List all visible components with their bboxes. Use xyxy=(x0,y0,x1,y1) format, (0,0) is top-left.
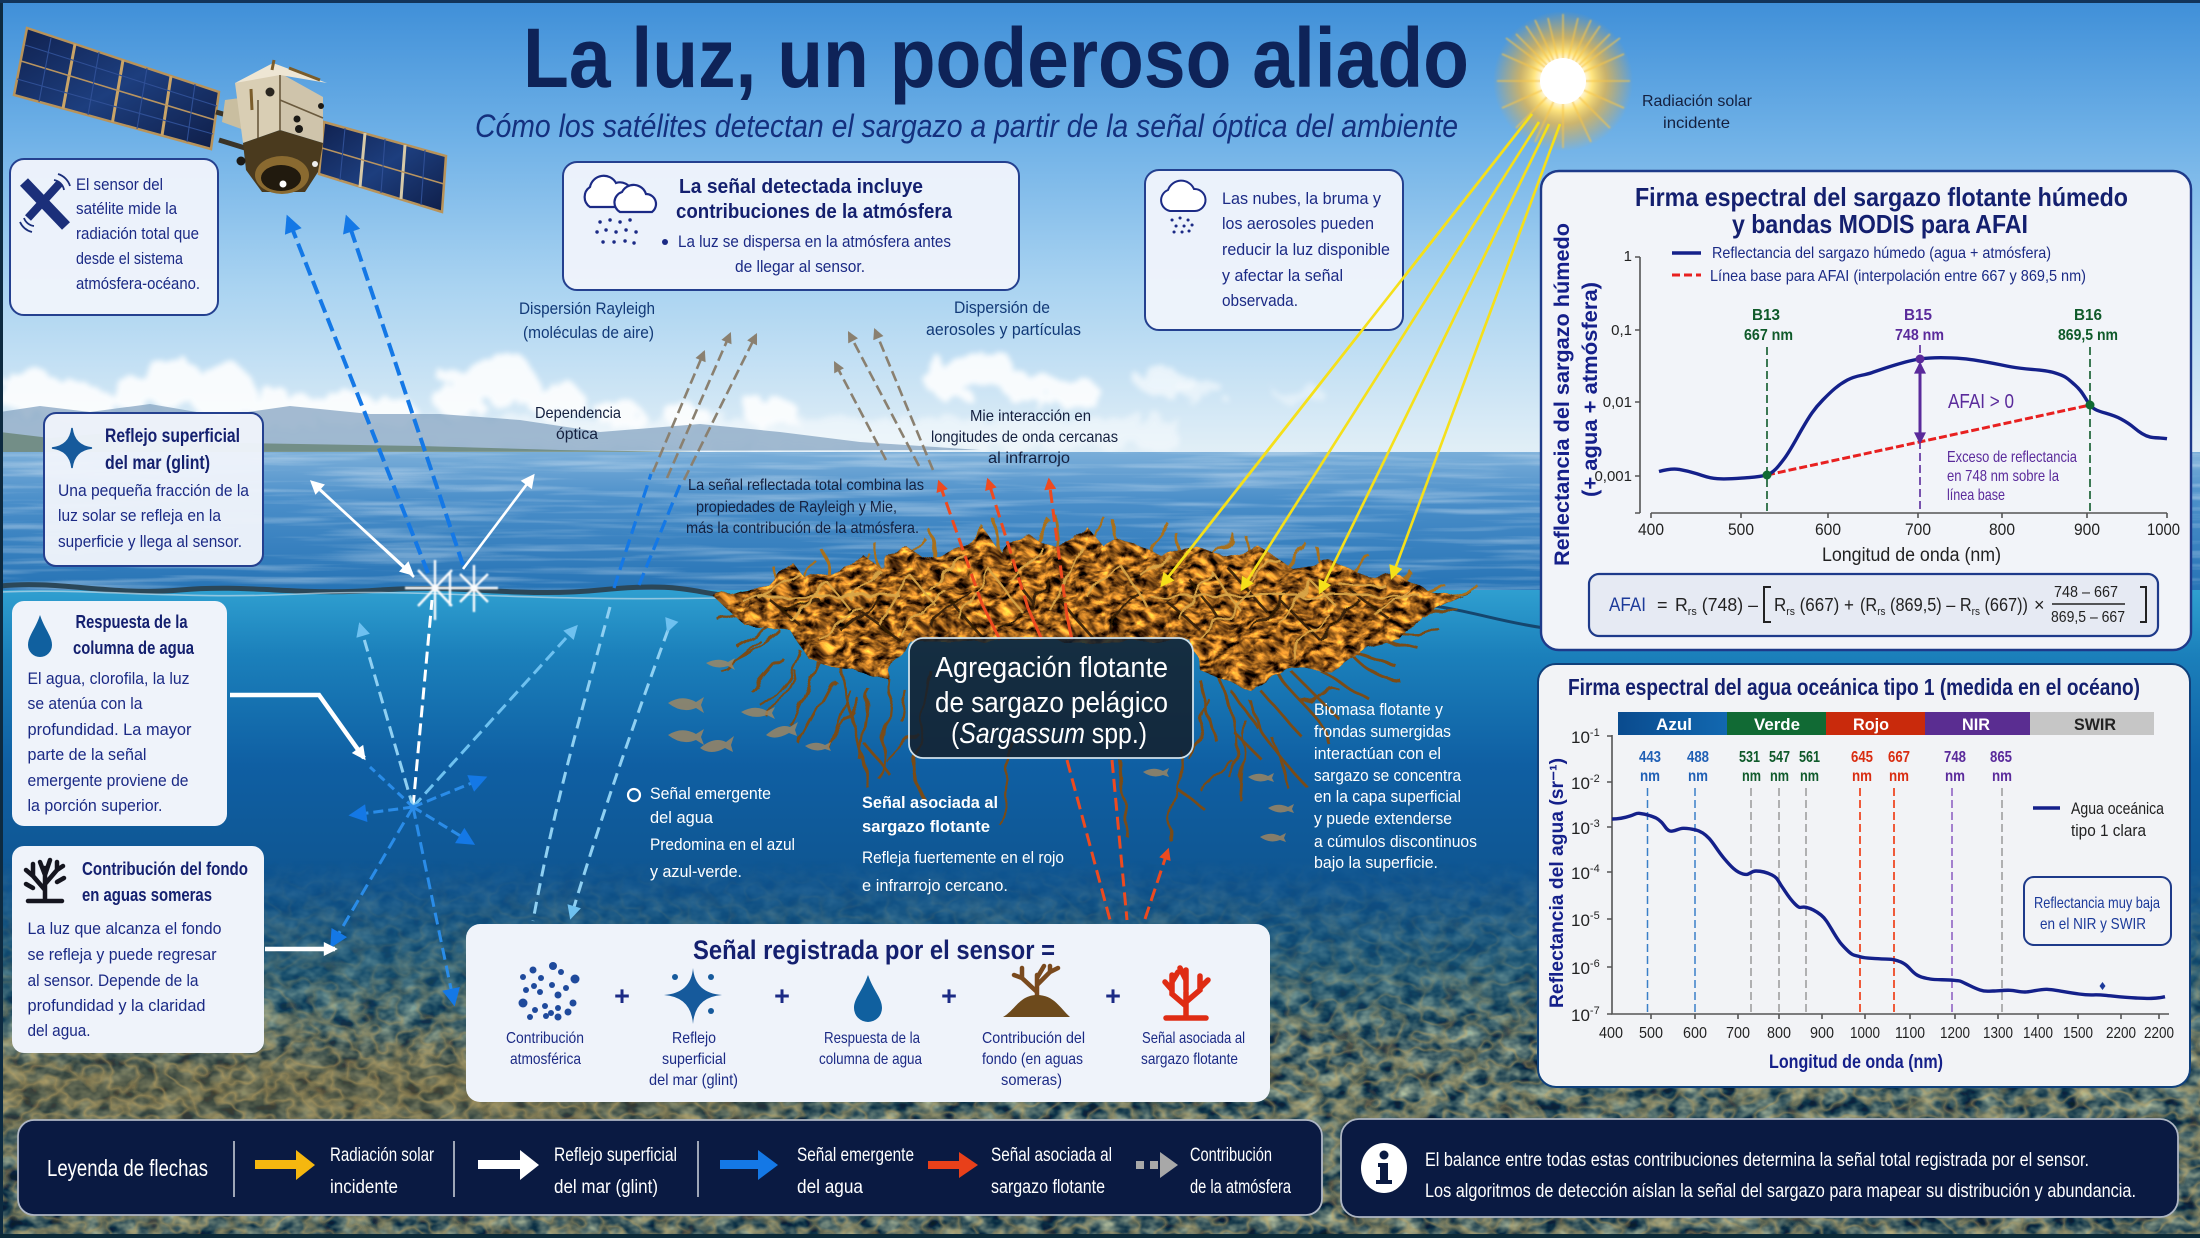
y axis label: Reflectancia del sargazo húmedo xyxy=(1551,223,1574,566)
spectral band bar: SWIR xyxy=(2074,715,2116,734)
axes: 2200 xyxy=(2144,1025,2174,1042)
band markers: B13 xyxy=(1752,307,1780,324)
label: sargassum signal: Señal asociada al xyxy=(1142,1030,1245,1047)
axes: 600 xyxy=(1815,520,1841,539)
formula: AFAI: rs xyxy=(1877,606,1886,618)
wavelength labels: nm xyxy=(1770,768,1789,785)
axes: 1500 xyxy=(2063,1025,2093,1042)
axes: 1000 xyxy=(1850,1025,1880,1042)
text: incident radiation: Radiación solar xyxy=(330,1145,435,1166)
panel: bottom contribution xyxy=(12,846,264,1053)
axes: 900 xyxy=(2074,520,2100,539)
label: Mie interaction: Mie interacción en xyxy=(970,408,1091,425)
text: water-leaving signal: Predomina en el azul xyxy=(650,835,795,854)
text: sargassum signal: sargazo flotante xyxy=(862,817,990,836)
text: sargassum signal xyxy=(991,1145,1112,1198)
panel: clouds, haze and aerosols xyxy=(1145,170,1403,330)
spectral curve xyxy=(1612,813,2165,998)
text: water column description: El agua, clorofila, la luz xyxy=(28,669,190,688)
label: atmospheric contribution: atmosférica xyxy=(510,1051,581,1068)
callout: floating pelagic sargassum: (Sargassum spp.) xyxy=(951,718,1147,750)
text: water-leaving signal xyxy=(628,784,795,881)
formula: AFAI: AFAI xyxy=(1609,595,1646,616)
text: floating biomass: a cúmulos discontinuos xyxy=(1314,832,1477,851)
text: sensor description: satélite mide la xyxy=(76,199,177,218)
annotation: reflectance excess xyxy=(1947,449,2077,504)
axes: -4 xyxy=(1590,863,1600,875)
callout: floating pelagic sargassum xyxy=(909,638,1193,758)
wavelength labels: nm xyxy=(1992,768,2012,785)
axes: -2 xyxy=(1590,773,1600,785)
icon: cloud xyxy=(1161,181,1206,232)
subtitle: Cómo los satélites detectan el sargazo a partir de la señal óptica del ambiente xyxy=(475,108,1458,144)
text: sargassum signal xyxy=(862,793,1064,895)
label: sargassum signal xyxy=(1141,1030,1245,1068)
spectral band bar xyxy=(1618,712,2154,735)
icon: seabed coral xyxy=(1003,966,1070,1017)
heading xyxy=(105,426,240,474)
label: total reflected signal: propiedades de Rayleigh y Mie, xyxy=(696,499,897,516)
arrow: water signal xyxy=(720,1150,778,1180)
label: sea glint: Reflejo xyxy=(672,1030,716,1047)
panel: sargassum spectral signature chart xyxy=(1541,171,2191,650)
label: bottom contribution xyxy=(982,1030,1085,1089)
legend xyxy=(1672,245,2086,285)
text: sargassum signal: Señal asociada al xyxy=(991,1145,1112,1166)
label: aerosol scattering xyxy=(926,298,1081,339)
wavelength labels xyxy=(1639,749,2012,785)
illustration: satellite xyxy=(14,28,446,212)
arrow: yellow beam crossing the cloud panel xyxy=(1162,114,1532,585)
text: bottom description: profundidad y la claridad xyxy=(28,996,206,1015)
wavelength labels: 443 xyxy=(1639,749,1661,766)
band markers: B15 xyxy=(1904,307,1932,324)
text: water-leaving signal: y azul-verde. xyxy=(650,862,742,881)
text: water column description xyxy=(28,669,192,815)
text: floating biomass: en la capa superficial xyxy=(1314,787,1461,806)
arrows: incident solar radiation xyxy=(1162,114,1560,592)
panel: satellite sensor xyxy=(10,159,218,315)
formula: AFAI: rs xyxy=(1972,606,1980,618)
text: floating biomass: frondas sumergidas xyxy=(1314,722,1451,741)
formula: AFAI: (667)) xyxy=(1980,595,2028,615)
label: Rayleigh scattering: (moléculas de aire) xyxy=(523,323,654,342)
axes: 10 xyxy=(1571,911,1590,930)
icon: dark coral xyxy=(26,860,64,901)
axes: 10 xyxy=(1571,959,1590,978)
wavelength labels: 645 xyxy=(1851,749,1873,766)
wavelength labels: 488 xyxy=(1687,749,1709,766)
legend: tipo 1 clara xyxy=(2071,821,2146,840)
text: glint xyxy=(554,1145,677,1198)
text: balance note xyxy=(1425,1150,2136,1202)
dividers xyxy=(234,1141,698,1197)
text: water column description: emergente proviene de xyxy=(28,771,188,790)
spectral band bar: NIR xyxy=(1962,715,1990,734)
band markers: 748 nm xyxy=(1895,327,1944,344)
text: cloud note: reducir la luz disponible xyxy=(1222,240,1390,259)
heading: La señal detectada incluye xyxy=(679,176,923,198)
heading: Reflejo superficial xyxy=(105,426,240,447)
text: sargassum signal: e infrarrojo cercano. xyxy=(862,876,1008,895)
axes: 1300 xyxy=(1983,1025,2013,1042)
text: atmosphere xyxy=(1190,1145,1291,1198)
axes: 900 xyxy=(1810,1025,1834,1042)
axes: 800 xyxy=(1989,520,2015,539)
formula: AFAI: (667) + xyxy=(1795,595,1854,615)
panel: sensor signal equation xyxy=(466,924,1270,1102)
text: bottom description: La luz que alcanza el fondo xyxy=(28,919,222,938)
text: glint: Reflejo superficial xyxy=(554,1145,677,1166)
y axis label: Reflectancia del agua (sr⁻¹) xyxy=(1547,758,1568,1008)
text: floating biomass: bajo la superficie. xyxy=(1314,853,1438,872)
band markers xyxy=(1744,307,2118,513)
icon: glint star xyxy=(664,968,722,1024)
text: floating biomass: Biomasa flotante y xyxy=(1314,700,1443,719)
axes: -5 xyxy=(1590,910,1600,922)
text: floating biomass xyxy=(1314,700,1477,872)
formula: AFAI: = xyxy=(1657,595,1668,615)
axes: 0,01 xyxy=(1603,394,1632,411)
formula: AFAI: rs xyxy=(1786,606,1795,618)
label: Mie interaction xyxy=(931,408,1118,467)
text: cloud note: y afectar la señal xyxy=(1222,266,1343,285)
axes: 2200 xyxy=(2106,1025,2136,1042)
label: incident solar radiation xyxy=(1642,93,1753,132)
arrow: incident radiation xyxy=(255,1150,315,1180)
annotation: reflectance excess: Exceso de reflectancia xyxy=(1947,449,2077,466)
text: glint description: superficie y llega al sensor. xyxy=(58,532,242,551)
text: bottom description: del agua. xyxy=(28,1021,90,1040)
text: floating biomass: y puede extenderse xyxy=(1314,809,1452,828)
label: bottom contribution: fondo (en aguas xyxy=(982,1051,1083,1068)
label: Rayleigh scattering: Dispersión Rayleigh xyxy=(519,299,655,318)
text: sargassum signal: Señal asociada al xyxy=(862,793,998,812)
annotation: reflectance excess: en 748 nm sobre la xyxy=(1947,468,2059,485)
spectral band bar: Azul xyxy=(1656,715,1692,734)
text: bottom description xyxy=(28,919,222,1040)
wavelength labels: nm xyxy=(1852,768,1872,785)
formula: AFAI: rs xyxy=(1688,606,1697,618)
wavelength labels: 667 xyxy=(1888,749,1910,766)
text: sensor description: desde el sistema xyxy=(76,249,183,268)
heading: Respuesta de la xyxy=(76,612,188,632)
text: cloud note: los aerosoles pueden xyxy=(1222,214,1374,233)
panel: atmospheric contributions xyxy=(563,162,1019,290)
spectral band bar: Rojo xyxy=(1853,715,1889,734)
axes xyxy=(1594,248,2180,539)
band markers: B16 xyxy=(2074,307,2102,324)
axes: 1000 xyxy=(2147,520,2180,539)
x axis label: Longitud de onda (nm) xyxy=(1769,1052,1943,1073)
x axis label: Longitud de onda (nm) xyxy=(1822,545,2001,566)
y axis label xyxy=(1551,223,1602,566)
label: atmospheric contribution: Contribución xyxy=(506,1030,584,1047)
text: glint description: Una pequeña fracción de la xyxy=(58,481,249,500)
arrows: signal associated with floating sargassum xyxy=(939,480,1168,920)
arrows: sea surface glint xyxy=(312,476,533,620)
axes: 500 xyxy=(1639,1025,1663,1042)
illustration: floating sargassum mat xyxy=(668,515,1478,842)
heading: contribuciones de la atmósfera xyxy=(676,201,953,223)
annotation: reflectance excess: línea base xyxy=(1947,487,2005,504)
text: sargassum signal: Refleja fuertemente en el rojo xyxy=(862,848,1064,867)
arrows: atmospheric contribution xyxy=(653,330,933,480)
arrow: atmosphere xyxy=(1136,1152,1178,1178)
axes: 400 xyxy=(1638,520,1664,539)
label: sea glint: del mar (glint) xyxy=(649,1072,738,1089)
text: floating biomass: sargazo se concentra xyxy=(1314,766,1461,785)
axes: 10 xyxy=(1571,819,1590,838)
excess arrow xyxy=(1762,354,2094,480)
axes: 1200 xyxy=(1940,1025,1970,1042)
panel: ocean water spectral signature chart xyxy=(1538,664,2190,1087)
wavelength labels: 748 xyxy=(1944,749,1966,766)
heading xyxy=(1635,182,2128,239)
operator: plus: + xyxy=(614,981,630,1011)
panel: sea surface glint xyxy=(44,413,263,566)
axes: 700 xyxy=(1726,1025,1750,1042)
label: incident solar radiation: Radiación solar xyxy=(1642,93,1753,110)
text: incident radiation: incidente xyxy=(330,1177,398,1198)
label: aerosol scattering: Dispersión de xyxy=(954,298,1050,317)
wavelength labels: nm xyxy=(1640,768,1660,785)
text: balance note: El balance entre todas estas contribuciones determina la señal total registrada por el sensor. xyxy=(1425,1150,2089,1171)
wavelength labels: 865 xyxy=(1990,749,2012,766)
label: optical dependence: Dependencia xyxy=(535,405,621,422)
label: atmospheric contribution xyxy=(506,1030,584,1068)
band markers: 869,5 nm xyxy=(2058,327,2118,344)
text: water column description: se atenúa con la xyxy=(28,694,143,713)
text: water signal: Señal emergente xyxy=(797,1145,914,1166)
arrow: sargassum signal xyxy=(928,1152,978,1178)
axes: 800 xyxy=(1767,1025,1791,1042)
label: total reflected signal xyxy=(686,477,924,537)
wavelength labels: nm xyxy=(1800,768,1819,785)
text: atmosphere: de la atmósfera xyxy=(1190,1177,1291,1198)
wavelength labels: 561 xyxy=(1799,749,1820,766)
wavelength markers xyxy=(1648,788,2002,1014)
heading: en aguas someras xyxy=(82,885,212,905)
axes: 600 xyxy=(1683,1025,1707,1042)
icon: water drop xyxy=(854,975,882,1022)
axes: 10 xyxy=(1571,864,1590,883)
excess arrow: AFAI > 0 xyxy=(1948,391,2014,413)
text: glint: del mar (glint) xyxy=(554,1177,658,1198)
icon: satellite xyxy=(20,174,70,232)
wavelength labels: nm xyxy=(1945,768,1965,785)
marker xyxy=(2100,982,2106,990)
formula: AFAI: 748 – 667 xyxy=(2054,584,2118,601)
icon: water drop xyxy=(28,615,52,657)
legend: Línea base para AFAI (interpolación entre 667 y 869,5 nm) xyxy=(1710,268,2086,285)
axes: -1 xyxy=(1590,727,1600,739)
text: sensor description xyxy=(76,175,200,293)
label: water column response: columna de agua xyxy=(819,1051,922,1068)
title: La luz, un poderoso aliado xyxy=(523,11,1469,105)
text: floating biomass: interactúan con el xyxy=(1314,744,1441,763)
text: water column description: parte de la señal xyxy=(28,745,146,764)
text: water signal xyxy=(797,1145,914,1198)
text: water signal: del agua xyxy=(797,1177,863,1198)
axes: 1400 xyxy=(2023,1025,2053,1042)
text: cloud note: Las nubes, la bruma y xyxy=(1222,189,1381,208)
axes: 10 xyxy=(1571,1006,1590,1025)
operator: plus: + xyxy=(774,981,790,1011)
formula: AFAI: (748) – xyxy=(1697,595,1758,615)
arrows: water-leaving signal to the satellite xyxy=(288,218,463,573)
label: Mie interaction: longitudes de onda cercanas xyxy=(931,429,1118,446)
panel: water column response xyxy=(12,601,227,826)
axes: 10 xyxy=(1571,728,1590,747)
text: glint description xyxy=(58,481,249,551)
axes: -3 xyxy=(1590,818,1600,830)
arrows: underwater scattering xyxy=(332,600,668,1003)
callout: very low reflectance xyxy=(2024,877,2171,945)
label: water column response: Respuesta de la xyxy=(824,1030,920,1047)
operator: plus: + xyxy=(1105,981,1121,1011)
axes: 1100 xyxy=(1895,1025,1925,1042)
label: sea glint: superficial xyxy=(662,1051,726,1068)
heading xyxy=(676,176,953,223)
callout: very low reflectance: Reflectancia muy baja xyxy=(2034,895,2160,912)
label: total reflected signal: La señal reflectada total combina las xyxy=(688,477,924,494)
label: bottom contribution: someras) xyxy=(1001,1072,1062,1089)
wavelength labels: 531 xyxy=(1739,749,1760,766)
text: scattering note: de llegar al sensor. xyxy=(735,257,865,276)
arrows: pointers from text boxes xyxy=(230,695,364,949)
spectral curve xyxy=(1659,358,2167,479)
callout: floating pelagic sargassum: de sargazo pelágico xyxy=(935,687,1168,719)
text: sensor description: El sensor del xyxy=(76,175,163,194)
text: bottom description: se refleja y puede regresar xyxy=(28,945,217,964)
icon: info xyxy=(1361,1143,1407,1193)
icon: glint star xyxy=(52,428,92,468)
y axis label: (+ agua + atmósfera) xyxy=(1579,282,1602,497)
heading: Firma espectral del sargazo flotante húmedo xyxy=(1635,182,2128,212)
axes: 1 xyxy=(1624,248,1632,265)
operator: plus: + xyxy=(941,981,957,1011)
formula: AFAI: R xyxy=(1675,595,1688,615)
callout: balance of contributions xyxy=(1341,1119,2178,1217)
text: sargassum signal: sargazo flotante xyxy=(991,1177,1105,1198)
text: scattering note xyxy=(662,232,951,276)
label: sargassum signal: sargazo flotante xyxy=(1141,1051,1238,1068)
spectral band bar: Verde xyxy=(1754,715,1800,734)
arrow: glint xyxy=(478,1150,539,1180)
wavelength labels: nm xyxy=(1688,768,1708,785)
label: incident solar radiation: incidente xyxy=(1663,115,1730,132)
heading: columna de agua xyxy=(73,638,195,658)
label: total reflected signal: más la contribución de la atmósfera. xyxy=(686,520,919,537)
text: water column description: la porción superior. xyxy=(28,796,162,815)
arrows: water signal leaving the surface xyxy=(614,474,682,588)
heading xyxy=(73,612,195,658)
axes: 10 xyxy=(1571,774,1590,793)
label: aerosol scattering: aerosoles y partículas xyxy=(926,320,1081,339)
formula: AFAI: R xyxy=(1774,595,1787,615)
label: Rayleigh scattering xyxy=(519,299,655,342)
icon: sun xyxy=(1493,11,1633,151)
heading: y bandas MODIS para AFAI xyxy=(1732,209,2028,239)
text: atmosphere: Contribución xyxy=(1190,1145,1272,1166)
axes: -6 xyxy=(1590,958,1600,970)
callout: very low reflectance: en el NIR y SWIR xyxy=(2040,916,2146,933)
legend title: Leyenda de flechas xyxy=(47,1155,208,1181)
label: bottom contribution: Contribución del xyxy=(982,1030,1085,1047)
heading xyxy=(82,859,248,905)
heading: Señal registrada por el sensor = xyxy=(693,935,1055,965)
legend: arrow key xyxy=(18,1120,1322,1215)
axes xyxy=(1571,727,2174,1042)
label: optical dependence: óptica xyxy=(556,426,598,443)
wavelength labels: 547 xyxy=(1769,749,1790,766)
text: water-leaving signal: del agua xyxy=(650,808,714,827)
legend: Agua oceánica xyxy=(2071,799,2164,818)
formula: AFAI: (R xyxy=(1860,595,1879,615)
band markers: 667 nm xyxy=(1744,327,1793,344)
axes: 500 xyxy=(1728,520,1754,539)
icon: clouds and aerosols xyxy=(585,176,656,243)
text: water-leaving signal: Señal emergente xyxy=(650,784,771,803)
text: cloud note xyxy=(1222,189,1390,310)
text: water column description: profundidad. La mayor xyxy=(28,720,192,739)
text: incident radiation xyxy=(330,1145,435,1198)
label: optical dependence xyxy=(535,405,621,443)
formula: AFAI: (869,5) – R xyxy=(1886,595,1972,615)
axes: -7 xyxy=(1590,1005,1600,1017)
wavelength labels: nm xyxy=(1742,768,1761,785)
legend xyxy=(2033,799,2164,840)
formula: AFAI xyxy=(1589,574,2158,636)
heading: del mar (glint) xyxy=(105,453,210,474)
axes: 0,001 xyxy=(1594,468,1632,485)
text: glint description: luz solar se refleja en la xyxy=(58,506,221,525)
label: Mie interaction: al infrarrojo xyxy=(988,450,1070,467)
text: sensor description: radiación total que xyxy=(76,224,199,243)
axes: 400 xyxy=(1599,1025,1623,1042)
label: water column response xyxy=(819,1030,922,1068)
icon: atmospheric particles xyxy=(518,962,580,1020)
AFAI baseline xyxy=(1767,405,2090,475)
text: scattering note: La luz se dispersa en la atmósfera antes xyxy=(678,232,951,251)
formula: AFAI: 869,5 – 667 xyxy=(2051,609,2125,626)
text: sensor description: atmósfera-océano. xyxy=(76,274,200,293)
wavelength labels: nm xyxy=(1889,768,1909,785)
axes: 0,1 xyxy=(1611,322,1632,339)
legend: Reflectancia del sargazo húmedo (agua + atmósfera) xyxy=(1712,245,2051,262)
heading: Contribución del fondo xyxy=(82,859,248,879)
text: cloud note: observada. xyxy=(1222,291,1298,310)
label: sea glint xyxy=(649,1030,738,1089)
callout: floating pelagic sargassum: Agregación flotante xyxy=(935,652,1168,684)
formula: AFAI: × xyxy=(2034,595,2045,615)
axes: 700 xyxy=(1905,520,1931,539)
text: bottom description: al sensor. Depende de la xyxy=(28,971,199,990)
icon: red coral xyxy=(1165,968,1208,1018)
